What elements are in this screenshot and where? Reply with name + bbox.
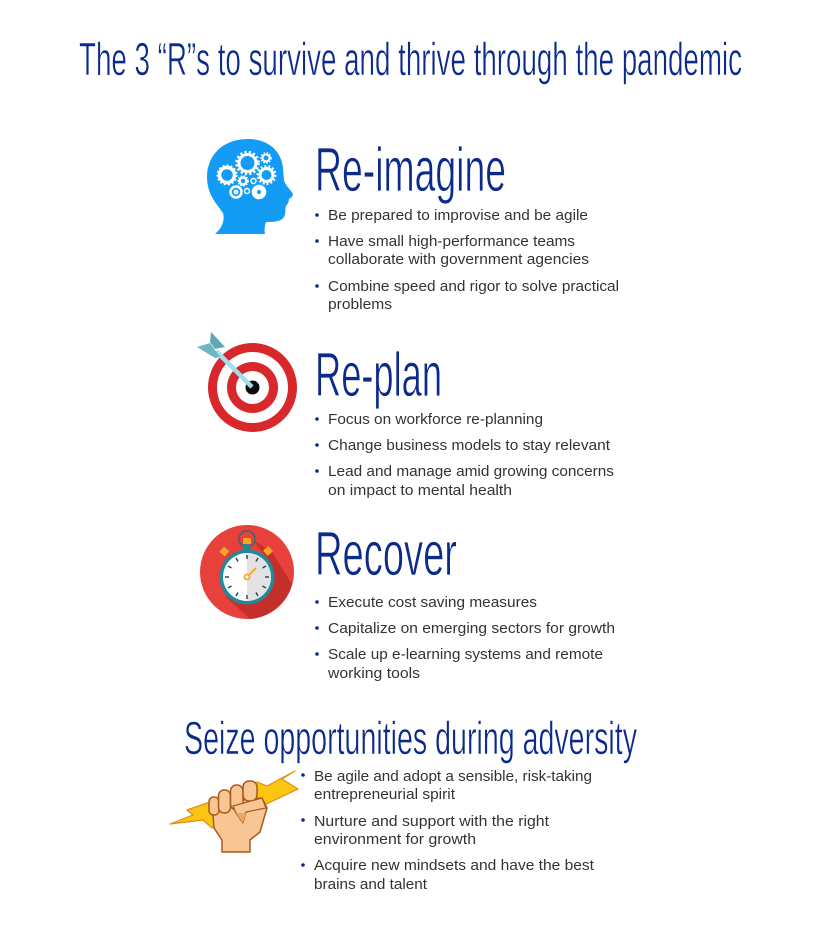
bullet list: re-plan: on impact to mental health	[328, 482, 512, 499]
panel: recover	[200, 520, 615, 682]
icon: fist holding lightning bolt	[170, 771, 298, 852]
icon: head with gears	[207, 139, 293, 234]
bullet list: recover: Execute cost saving measures	[328, 594, 537, 611]
bullet list: seize opportunities: Acquire new mindsets and have the best	[314, 857, 595, 874]
bullet list: recover: Capitalize on emerging sectors for growth	[328, 620, 615, 637]
bullet list: recover: working tools	[327, 665, 420, 682]
bullet list: re-plan: Lead and manage amid growing concerns	[328, 463, 614, 480]
icon: stopwatch	[200, 525, 294, 619]
panel: re-imagine	[207, 136, 619, 313]
panel: seize opportunities	[170, 712, 637, 893]
bullet list: re-imagine	[315, 207, 619, 313]
bullet list: re-imagine: collaborate with government agencies	[328, 251, 589, 268]
bullet list: re-imagine: Have small high-performance teams	[328, 233, 575, 250]
bullet list: seize opportunities: entrepreneurial spirit	[314, 786, 456, 803]
bullet list: re-imagine: problems	[328, 296, 392, 313]
bullet list: re-imagine: Be prepared to improvise and be agile	[328, 207, 588, 224]
bullet list: seize opportunities: environment for growth	[314, 831, 476, 848]
bullet list: recover	[315, 594, 615, 682]
bullet list: re-imagine: Combine speed and rigor to solve practical	[328, 278, 619, 295]
heading: re-plan: Re-plan	[315, 341, 442, 410]
bullet list: re-plan	[315, 411, 614, 499]
heading: recover: Recover	[315, 520, 457, 589]
bullet list: seize opportunities	[301, 768, 595, 893]
bullet list: re-plan: Change business models to stay relevant	[328, 437, 611, 454]
bullet list: recover: Scale up e-learning systems and remote	[328, 646, 603, 663]
panel: re-plan	[197, 332, 614, 499]
bullet list: seize opportunities: Nurture and support with the right	[314, 813, 550, 830]
bullet list: seize opportunities: Be agile and adopt a sensible, risk-taking	[314, 768, 592, 785]
heading: re-imagine: Re-imagine	[315, 136, 506, 205]
icon: target with arrow	[197, 332, 297, 432]
bullet list: seize opportunities: brains and talent	[314, 876, 428, 893]
bullet list: re-plan: Focus on workforce re-planning	[328, 411, 543, 428]
